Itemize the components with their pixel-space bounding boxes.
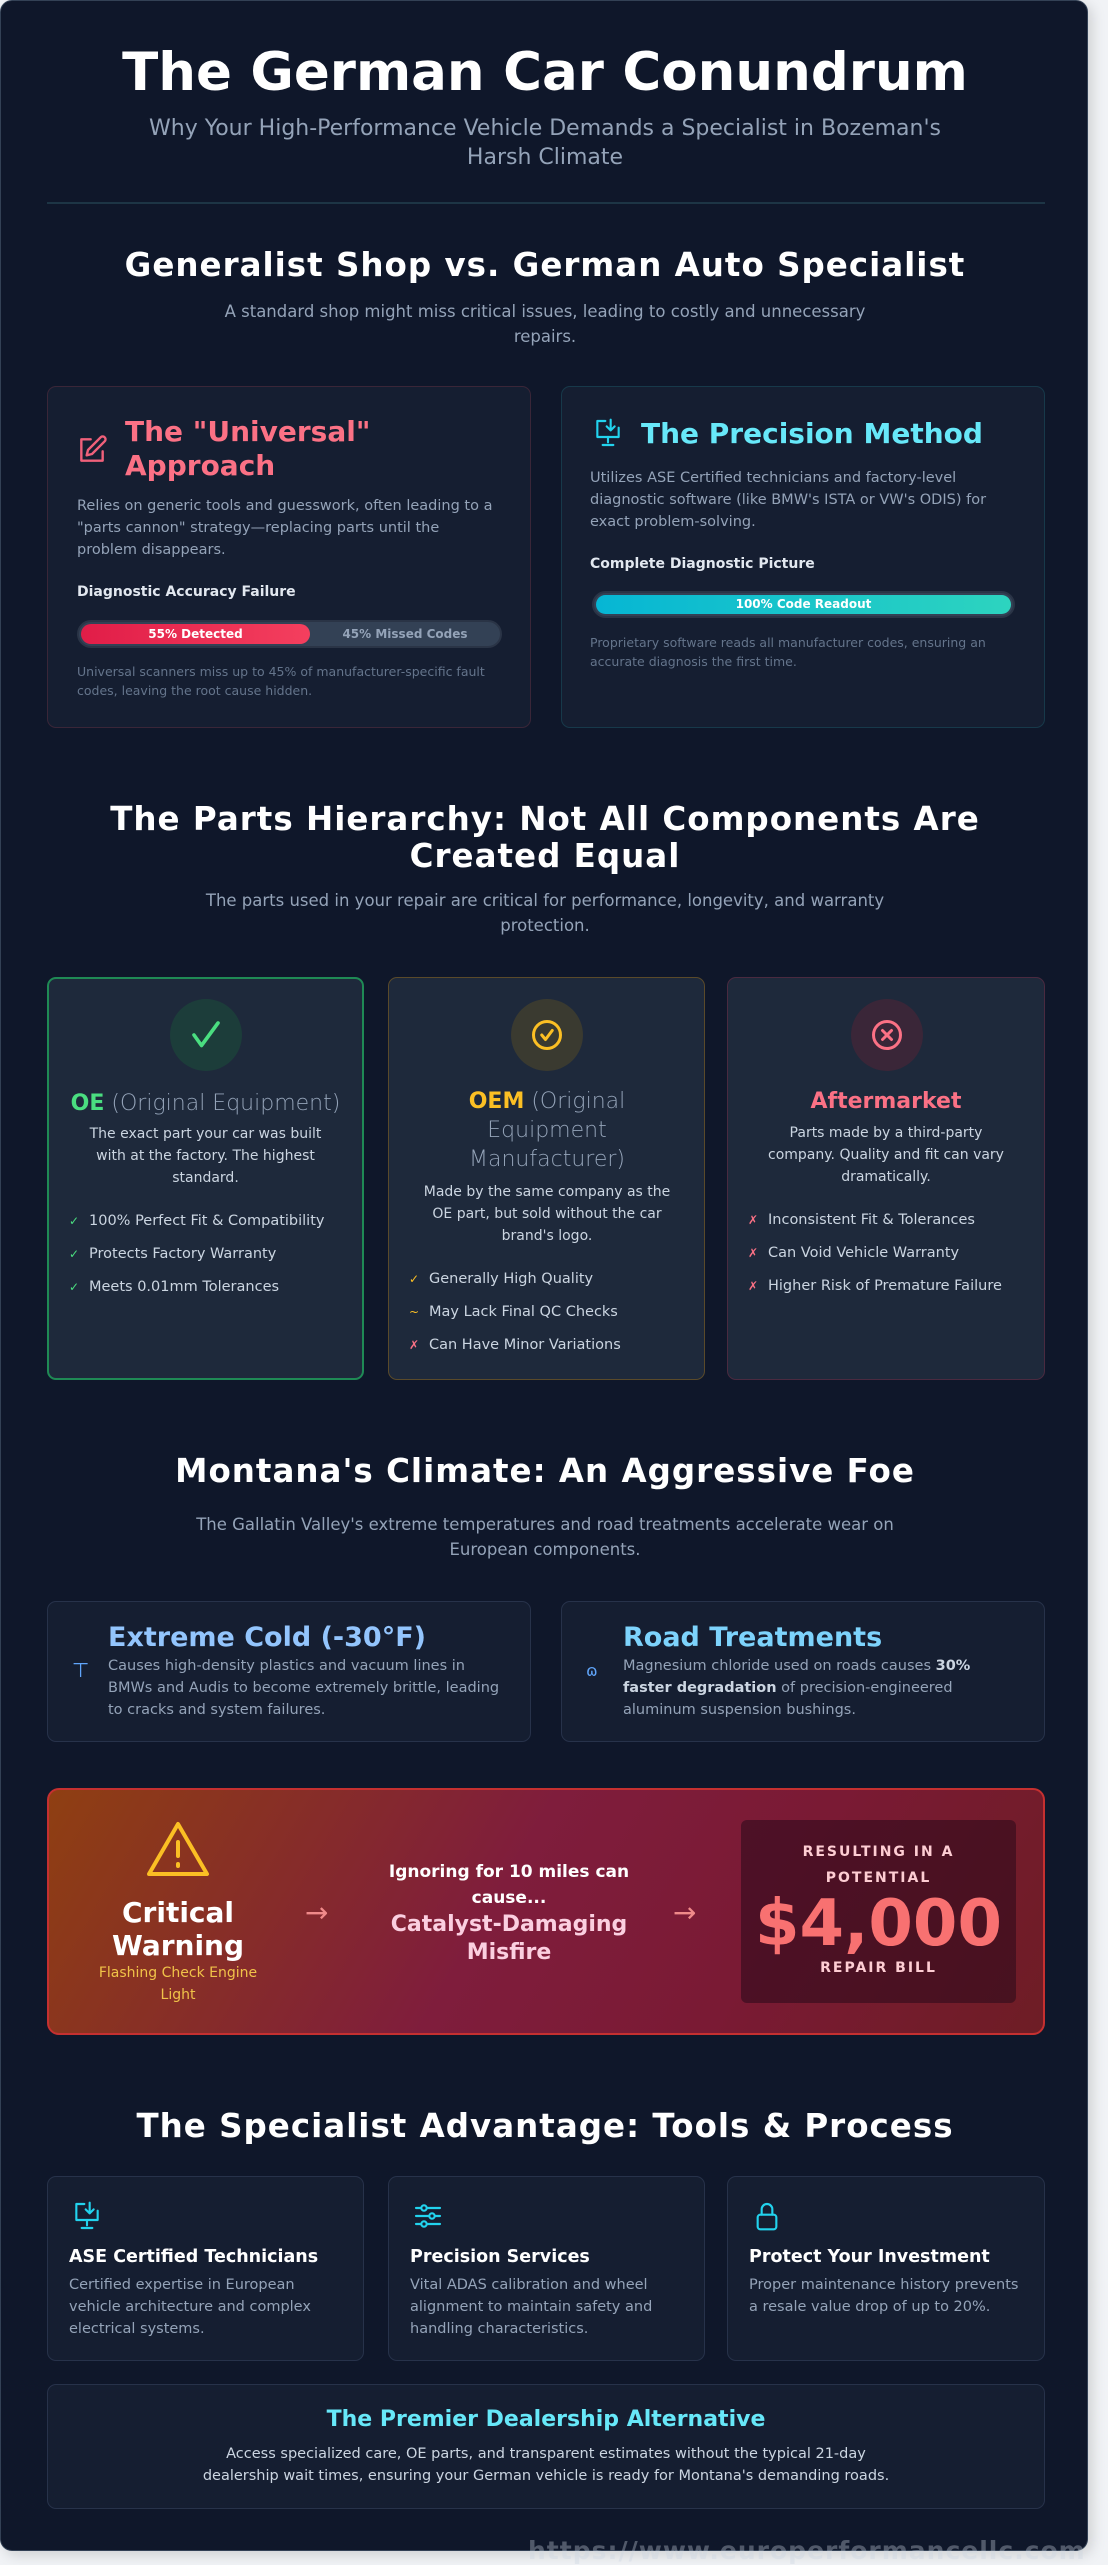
heading: Extreme Cold (-30°F) — [108, 1622, 426, 1653]
list — [409, 1271, 621, 1353]
watermark url: https://www.europerformancellc.com — [528, 2536, 1086, 2565]
title: Protect Your Investment — [749, 2247, 990, 2267]
list — [748, 1212, 1002, 1294]
heading: specialist advantage: The Specialist Advantage: Tools & Process — [136, 2107, 954, 2145]
list: ✗ — [748, 1246, 758, 1260]
warning label — [99, 1896, 257, 2003]
list: ✓ — [409, 1272, 419, 1286]
panel: OE — [47, 977, 364, 1380]
heading: parts hierarchy: The Parts Hierarchy: Not All Components Are Created Equal — [110, 800, 980, 875]
panel: universal approach — [47, 386, 531, 728]
description: The exact part your car was built with at the factory. The highest standard. — [90, 1126, 321, 1186]
cost box: $4,000 — [755, 1887, 1002, 1961]
panel: OEM — [388, 977, 705, 1380]
list: ~ — [409, 1305, 419, 1319]
warning label: Flashing Check Engine Light — [99, 1965, 257, 2003]
bar chart: 55/45 — [77, 620, 502, 648]
bar chart: 100%: 100% Code Readout — [736, 597, 871, 611]
heading: The Precision Method — [641, 417, 983, 450]
list: ✗ — [748, 1279, 758, 1293]
subheading: The parts used in your repair are critical for performance, longevity, and warranty protection. — [206, 891, 884, 935]
list: ✓ — [69, 1247, 79, 1261]
icon: lock — [756, 2202, 778, 2230]
title: The Premier Dealership Alternative — [327, 2407, 765, 2432]
list: Meets 0.01mm Tolerances — [89, 1279, 279, 1295]
title: Aftermarket — [810, 1089, 961, 1114]
list: Can Void Vehicle Warranty — [768, 1245, 959, 1261]
list: Higher Risk of Premature Failure — [768, 1278, 1002, 1294]
subheading: The Gallatin Valley's extreme temperatures and road treatments accelerate wear on European components. — [196, 1515, 894, 1559]
list: ✗ — [748, 1213, 758, 1227]
panel: extreme cold — [47, 1601, 531, 1742]
panel: precision services — [388, 2176, 705, 2361]
panel: aftermarket — [727, 977, 1045, 1380]
panel: ASE technicians — [47, 2176, 364, 2361]
icon: monitor — [75, 2202, 99, 2230]
list: Protects Factory Warranty — [89, 1246, 276, 1262]
title: OE (Original Equipment) — [71, 1091, 340, 1116]
panel: protect investment — [727, 2176, 1045, 2361]
title: OEM (Original Equipment Manufacturer) — [469, 1089, 625, 1172]
subtitle: Why Your High-Performance Vehicle Demands a Specialist in Bozeman's Harsh Climate — [149, 116, 941, 170]
cost box — [741, 1820, 1016, 2003]
list: May Lack Final QC Checks — [429, 1304, 618, 1320]
text: Causes high-density plastics and vacuum lines in BMWs and Audis to become extremely brittle, leading to cracks and system failures. — [108, 1658, 499, 1718]
text: Magnesium chloride used on roads causes 30% faster degradation of precision-engineered aluminum suspension bushings. — [623, 1658, 970, 1718]
panel: road treatments — [561, 1601, 1045, 1742]
icon: monitor — [596, 418, 620, 446]
description: Parts made by a third-party company. Quality and fit can vary dramatically. — [768, 1125, 1004, 1185]
title: The German Car Conundrum — [122, 42, 968, 103]
list: Inconsistent Fit & Tolerances — [768, 1212, 975, 1228]
text: Relies on generic tools and guesswork, often leading to a "parts cannon" strategy—replacing parts until the problem disappears. — [77, 498, 492, 558]
icon: warning — [147, 1822, 210, 1876]
heading: generalist vs specialist: Generalist Shop vs. German Auto Specialist — [125, 246, 965, 284]
text: Utilizes ASE Certified technicians and factory-level diagnostic software (like BMW's ISTA or VW's ODIS) for exact problem-solving. — [590, 470, 986, 530]
list: 100% Perfect Fit & Compatibility — [89, 1213, 324, 1229]
panel: critical warning — [47, 1788, 1045, 2035]
heading: Road Treatments — [623, 1622, 882, 1653]
arrow: → — [305, 1896, 328, 1929]
footnote: Universal scanners miss up to 45% of manufacturer-specific fault codes, leaving the root cause hidden. — [77, 664, 485, 698]
list: ✗ — [409, 1338, 419, 1352]
title: ASE Certified Technicians — [69, 2247, 318, 2267]
arrow: → — [673, 1896, 696, 1929]
list: ✓ — [69, 1214, 79, 1228]
heading: climate: Montana's Climate: An Aggressive Foe — [175, 1452, 915, 1490]
title: Precision Services — [410, 2247, 590, 2267]
consequence — [389, 1862, 629, 1965]
text: Proper maintenance history prevents a resale value drop of up to 20%. — [749, 2277, 1018, 2315]
text: Access specialized care, OE parts, and transparent estimates without the typical 21-day dealership wait times, ensuring your German vehicle is ready for Montana's demanding roads. — [203, 2446, 889, 2484]
text: Vital ADAS calibration and wheel alignment to maintain safety and handling characteristics. — [410, 2277, 652, 2337]
icon: circle x — [851, 999, 923, 1071]
cost box: REPAIR BILL — [820, 1960, 937, 1976]
icon: thermometer: ⊤ — [72, 1658, 89, 1682]
icon: circle check — [511, 999, 583, 1071]
list: ✓ — [69, 1280, 79, 1294]
panel: dealership alternative — [47, 2384, 1045, 2509]
description: Made by the same company as the OE part, but sold without the car brand's logo. — [424, 1184, 670, 1244]
icon: check — [170, 999, 242, 1071]
consequence: Ignoring for 10 miles can cause... — [389, 1862, 629, 1908]
icon: pencil — [80, 435, 107, 462]
footnote: Proprietary software reads all manufacturer codes, ensuring an accurate diagnosis the first time. — [590, 635, 986, 669]
icon: drop: ɷ — [586, 1661, 598, 1680]
bar chart: 100% — [592, 591, 1015, 618]
list — [69, 1213, 324, 1295]
warning label: Critical Warning — [112, 1896, 244, 1962]
heading: The "Universal" Approach — [125, 415, 370, 482]
list: Can Have Minor Variations — [429, 1337, 621, 1353]
icon: sliders — [415, 2204, 441, 2228]
subheading: A standard shop might miss critical issues, leading to costly and unnecessary repairs. — [225, 302, 865, 346]
label: Complete Diagnostic Picture — [590, 556, 815, 572]
consequence: Catalyst-Damaging Misfire — [391, 1912, 627, 1965]
bar chart: 55/45: 55% Detected — [148, 627, 243, 641]
bar chart: 55/45: 45% Missed Codes — [342, 627, 468, 641]
label: Diagnostic Accuracy Failure — [77, 584, 296, 600]
text: Certified expertise in European vehicle architecture and complex electrical systems. — [69, 2277, 311, 2337]
list: Generally High Quality — [429, 1271, 593, 1287]
panel: precision method — [561, 386, 1045, 728]
cost box: RESULTING IN A POTENTIAL — [803, 1844, 954, 1886]
